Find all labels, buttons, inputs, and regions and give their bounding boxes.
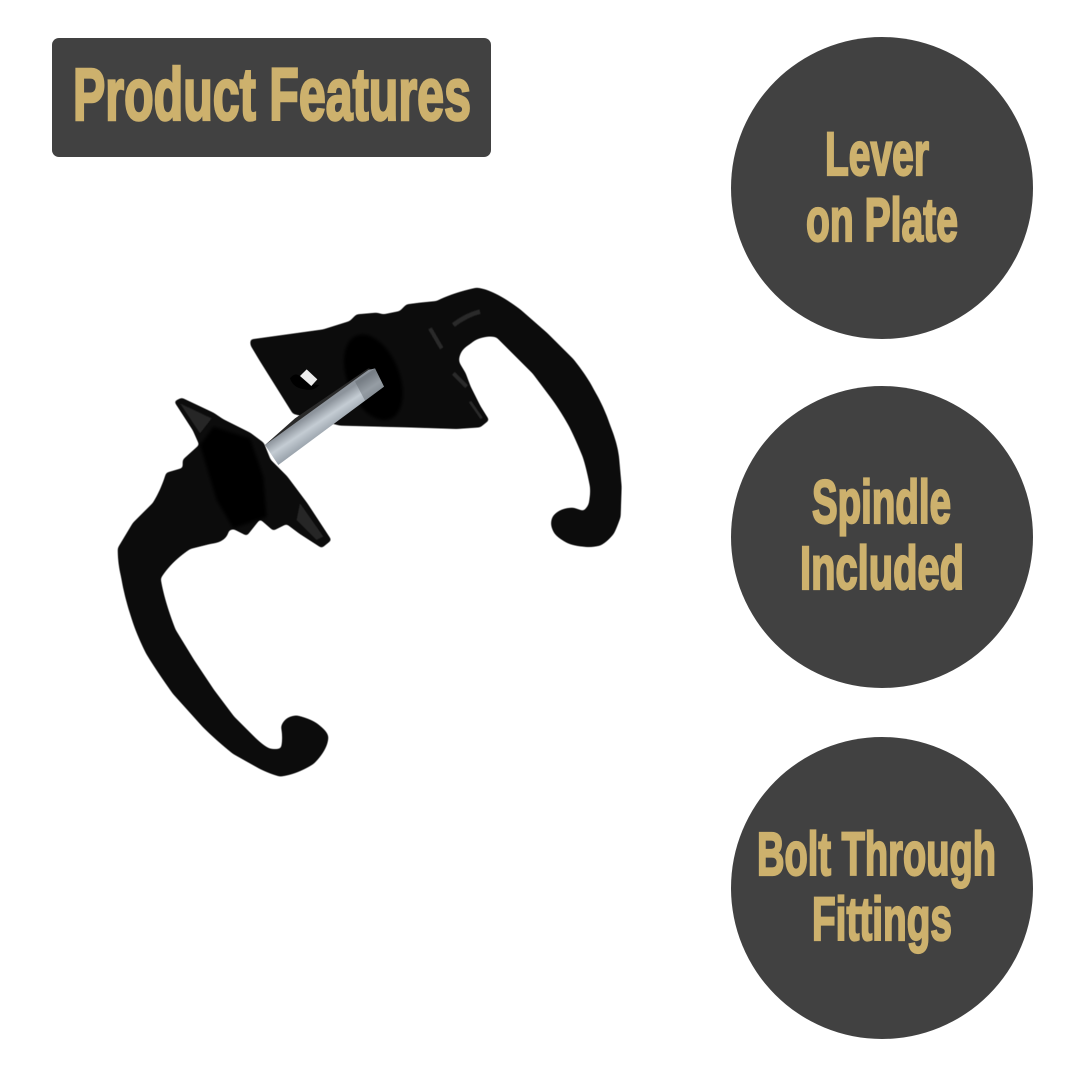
left lever on plate [118,398,331,776]
label: Spindle [812,468,951,536]
label: Fittings [812,885,952,953]
left plate highlights [180,403,323,540]
title banner [52,38,491,157]
label: on Plate [806,186,958,254]
feature circle: bolt through fittings [731,737,1033,1039]
right lever on plate [251,288,621,546]
left plate boss detail [200,427,267,528]
plate rosette recess [332,326,414,429]
title text: Product Features [73,53,471,136]
label: Lever [825,120,929,188]
product photo: door lever set [118,288,621,776]
feature circle: spindle included [731,386,1033,688]
feature circle: lever on plate [731,37,1033,339]
handle highlights [430,312,482,418]
label: Included [800,534,964,602]
plate bolt hole [290,369,319,390]
spindle [265,368,384,465]
